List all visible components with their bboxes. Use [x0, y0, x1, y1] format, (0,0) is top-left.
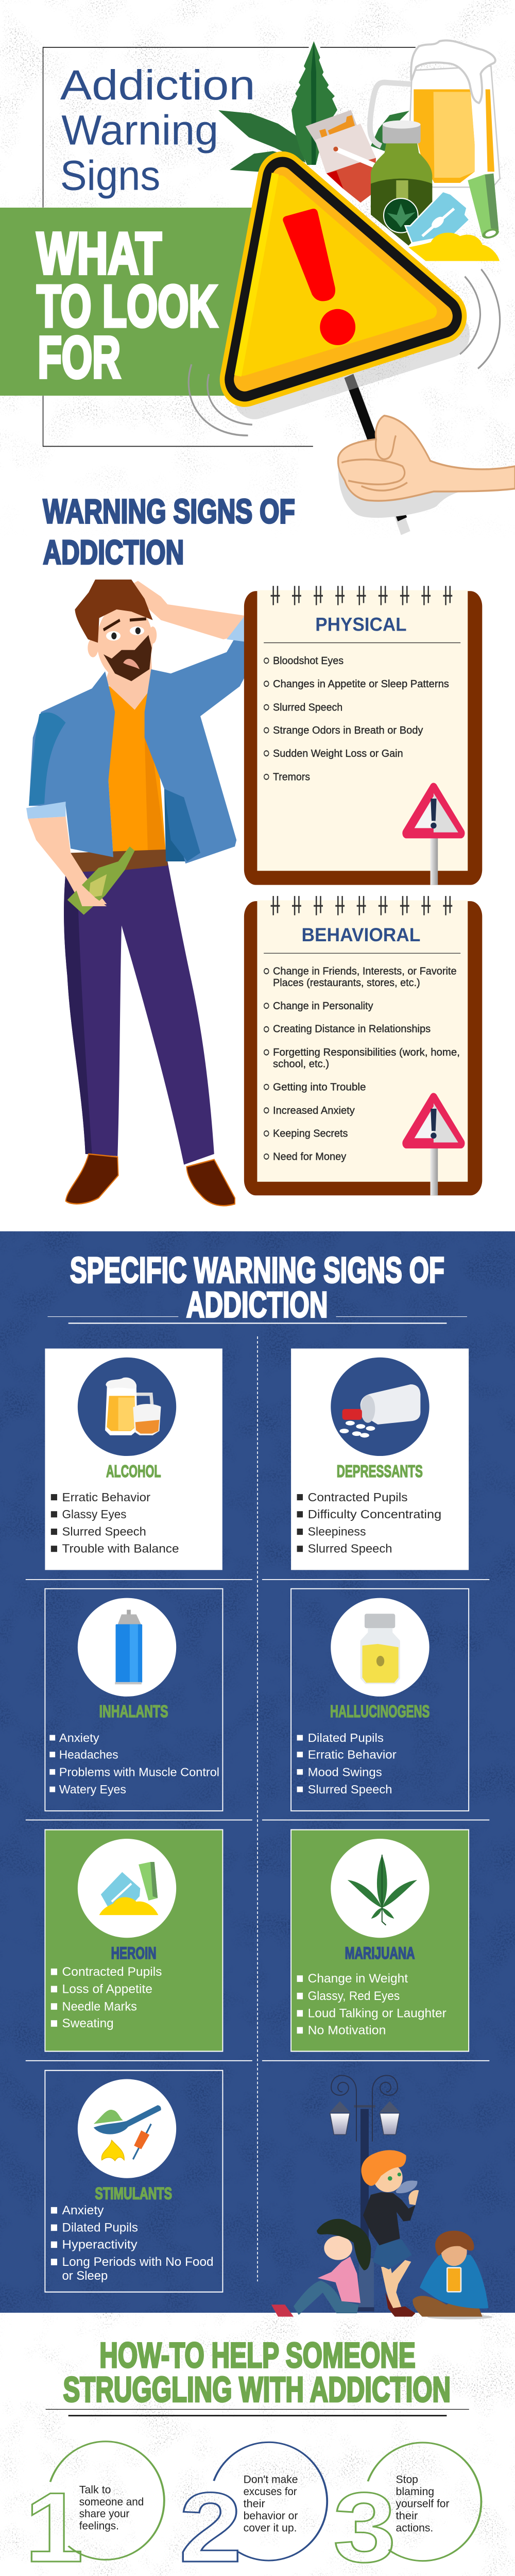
physical list: Strange Odors in Breath or Body [273, 724, 423, 736]
card: stimulants [45, 2071, 222, 2292]
card list: Hyperactivity [62, 2238, 138, 2251]
banner heading: What to look for [37, 221, 217, 391]
step 2 [179, 2442, 327, 2576]
card title: INHALANTS [99, 1702, 168, 1721]
hero title: Addiction Warning Signs: Signs [60, 152, 160, 199]
card list: Loud Talking or Laughter [308, 2006, 447, 2020]
step 1 [25, 2442, 164, 2576]
step 2: their [244, 2498, 265, 2510]
card list: Slurred Speech [308, 1542, 392, 1555]
icon: beer and whisky glass [105, 1378, 161, 1435]
step 3: yourself for [396, 2498, 450, 2510]
behavioral list: Creating Distance in Relationships [273, 1023, 431, 1035]
card list [49, 1731, 219, 1796]
step 1: someone and [79, 2496, 144, 2508]
card title: STIMULANTS [95, 2184, 172, 2203]
jacket [29, 618, 266, 863]
icon: spilled pill bottle [339, 1384, 420, 1437]
behavioral list: Keeping Secrets [273, 1127, 348, 1139]
card list: Sleepiness [308, 1524, 366, 1538]
card title: HEROIN [111, 1944, 157, 1962]
hero title: Addiction Warning Signs: Addiction [60, 62, 255, 109]
t-shirt [105, 686, 166, 857]
card list: No Motivation [308, 2023, 386, 2037]
notepad: behavioral signs [244, 896, 482, 1195]
notepad: physical signs [244, 586, 482, 885]
card: hallucinogens [291, 1589, 469, 1811]
card list: Glassy Eyes [62, 1507, 127, 1521]
card list: Anxiety [62, 2203, 104, 2217]
green bottle [67, 846, 134, 915]
icon: jar of yellow pills [360, 1614, 400, 1684]
illustration: teenagers by a street lamp [271, 2075, 493, 2319]
step 2: Don't make [244, 2473, 298, 2486]
physical list: Slurred Speech [273, 701, 342, 713]
card list: Sweating [62, 2016, 114, 2030]
icon: medicine bottle [371, 121, 432, 246]
behavioral list: Forgetting Responsibilities (work, home, [273, 1046, 460, 1058]
icon: spray can [115, 1610, 142, 1684]
behavioral list: Increased Anxiety [273, 1104, 355, 1116]
card list: Erratic Behavior [308, 1748, 397, 1761]
step 1: share your [79, 2508, 129, 2520]
spiral binding [271, 586, 452, 605]
street lamp [330, 2075, 400, 2311]
icon: razor blade [405, 192, 470, 243]
standing boy smoking [361, 2150, 419, 2317]
card list: Difficulty Concentrating [308, 1507, 441, 1521]
belt [71, 850, 167, 872]
icon: rolled paper [468, 174, 500, 241]
card: alcohol [45, 1348, 222, 1570]
icon: cannabis leaf [348, 1855, 417, 1925]
card list: Headaches [59, 1748, 118, 1761]
icon: razor, roll and powder [99, 1862, 158, 1915]
icon: warning road sign [406, 788, 461, 885]
notepad title: PHYSICAL [315, 614, 407, 635]
step 3: actions. [396, 2522, 433, 2534]
step 3: blaming [396, 2485, 434, 2498]
green banner [0, 208, 252, 396]
step 1: feelings. [79, 2520, 119, 2532]
icon: cannabis leaf [218, 41, 409, 172]
step 3: their [396, 2510, 418, 2522]
step 2: behavior or [244, 2510, 298, 2522]
card list: Contracted Pupils [308, 1490, 408, 1504]
notepad title: BEHAVIORAL [302, 925, 420, 946]
step 2: excuses for [244, 2485, 297, 2498]
panel: specific warning signs background [0, 1231, 515, 2313]
heading: Specific warning signs of addiction [70, 1249, 444, 1325]
heading: Warning signs of addiction [43, 493, 295, 571]
card: marijuana [291, 1830, 469, 2052]
card list: Anxiety [59, 1731, 99, 1744]
left arm and cuff [28, 817, 107, 906]
raised arm and hand [125, 581, 266, 643]
hero title: Addiction Warning Signs [60, 62, 255, 199]
step 2: cover it up. [244, 2522, 297, 2534]
exclamation mark [283, 209, 335, 301]
card list: Dilated Pupils [308, 1731, 384, 1744]
card list: Slurred Speech [308, 1783, 392, 1796]
card list: Problems with Muscle Control [59, 1765, 219, 1778]
banner heading: What to look for: TO LOOK [37, 274, 217, 340]
sitting girl [271, 2219, 371, 2317]
physical list: Changes in Appetite or Sleep Patterns [273, 677, 449, 689]
card list: Needle Marks [62, 1999, 137, 2013]
heading: How-to help someone struggling with addiction [63, 2336, 451, 2410]
physical list: Tremors [273, 770, 310, 783]
hero: decorative frame [43, 47, 416, 446]
icon: yellow powder pile [408, 233, 500, 261]
step 3 [333, 2443, 481, 2576]
icon: beer mug [370, 40, 500, 187]
head [75, 580, 157, 681]
trousers [64, 861, 214, 1165]
physical list: Sudden Weight Loss or Gain [273, 747, 403, 759]
card list: Long Periods with No Food [62, 2255, 214, 2268]
illustration: worried man holding a bottle [26, 580, 266, 1206]
icon: cigarette pack [305, 110, 376, 202]
card: heroin [45, 1830, 222, 2052]
heading: Warning signs of addiction: ADDICTION [43, 534, 184, 571]
card list [51, 1964, 162, 2030]
warning sign with exclamation mark [238, 174, 449, 396]
substances illustration: leaf, cigarettes, bottle, beer, razor, powder [218, 40, 500, 261]
icon: hand holding warning sign [188, 269, 515, 533]
card list [297, 1490, 441, 1555]
card title: MARIJUANA [345, 1944, 415, 1962]
sitting boy with beer [413, 2231, 488, 2317]
behavioral list: Change in Friends, Interests, or Favorite [273, 965, 457, 977]
step 3: Stop [396, 2473, 418, 2486]
card title: ALCOHOL [106, 1462, 161, 1481]
card list [51, 1490, 179, 1555]
card list: Change in Weight [308, 1971, 408, 1985]
card list: Erratic Behavior [62, 1490, 150, 1504]
icon: warning road sign [406, 1098, 461, 1195]
neck [105, 652, 153, 710]
card list: Watery Eyes [59, 1783, 126, 1796]
banner heading: What to look for: FOR [38, 325, 121, 391]
heading: Specific warning signs of addiction: ADDICTION [186, 1284, 328, 1325]
behavioral list: Change in Personality [273, 999, 373, 1011]
sign pole and shadows [349, 376, 406, 533]
card list: or Sleep [62, 2268, 108, 2282]
behavioral list: school, etc.) [273, 1058, 329, 1070]
card list: Dilated Pupils [62, 2221, 138, 2234]
heading: Warning signs of addiction: WARNING SIGNS OF [43, 493, 295, 531]
step 1: Talk to [79, 2484, 111, 2496]
icon: spoon, flame and syringe [94, 2105, 161, 2161]
card list: Glassy, Red Eyes [308, 1989, 400, 2003]
card list: Trouble with Balance [62, 1542, 179, 1555]
behavioral list: Need for Money [273, 1150, 347, 1162]
card list: Contracted Pupils [62, 1964, 162, 1978]
spiral binding [271, 896, 452, 915]
behavioral list: Getting into Trouble [273, 1080, 366, 1093]
card: inhalants [45, 1589, 222, 1811]
hero title: Addiction Warning Signs: Warning [61, 107, 218, 154]
card: depressants [291, 1348, 469, 1570]
card list: Loss of Appetite [62, 1982, 152, 1996]
behavioral list [264, 965, 460, 1162]
card list [51, 2203, 214, 2282]
card list [297, 1731, 397, 1796]
card title: DEPRESSANTS [337, 1462, 423, 1481]
card list: Mood Swings [308, 1765, 382, 1778]
motion arcs [188, 269, 500, 435]
card list: Slurred Speech [62, 1524, 146, 1538]
banner heading: What to look for: WHAT [37, 221, 162, 286]
shoes [66, 1154, 235, 1206]
behavioral list: Places (restaurants, stores, etc.) [273, 976, 420, 989]
physical list: Bloodshot Eyes [273, 654, 344, 666]
card title: HALLUCINOGENS [330, 1702, 430, 1721]
physical list [264, 654, 449, 783]
card list [297, 1971, 447, 2037]
